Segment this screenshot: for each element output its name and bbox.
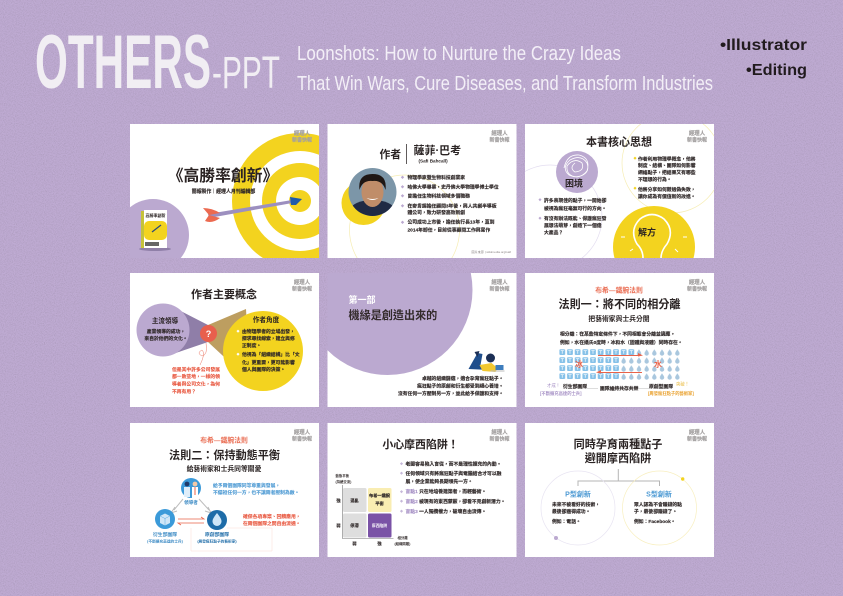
logo <box>489 278 510 292</box>
role tags: Illustrator, Editing: •Editing <box>746 62 807 79</box>
blue note: 不偏袒任何一方，也不讓兩者壓制為敵。 <box>213 489 299 496</box>
logo: 經理人 <box>491 428 508 436</box>
red question text: 導者與公司文化，為何 <box>172 380 220 388</box>
role tags: Illustrator, Editing: •Illustrator <box>720 37 807 54</box>
header subtitle: book title: Loonshots: How to Nurture the Crazy Ideas <box>297 43 621 65</box>
P-type circle: 例如：電話。 <box>552 518 581 525</box>
section label: 第一部 <box>348 294 376 305</box>
author bio bullets: 公司成功上市後，擔任執行長13年，直到 <box>408 218 495 226</box>
logo: 新書快報 <box>489 436 510 442</box>
red kicker: 布希—鐵腕法則 <box>595 286 643 294</box>
decorative yellow ring <box>349 174 460 258</box>
heading: 同時孕育兩種點子 <box>574 437 662 451</box>
chart: 2x2 matrix: 強 <box>336 497 341 504</box>
chart: 2x2 matrix: 平衡 <box>375 500 384 507</box>
red question text: 但是其中許多公司發展 <box>172 366 220 373</box>
S-type circle: 例如：Facebook。 <box>634 518 676 525</box>
heading: 小心摩西陷阱！ <box>382 437 459 451</box>
red question text: 不再有用？ <box>172 388 196 395</box>
logo: 新書快報 <box>687 286 707 292</box>
logo: 新書快報 <box>489 136 510 144</box>
heading <box>574 437 662 465</box>
logo <box>687 428 707 442</box>
problem bullets: 被視為瘋狂毫無可行的方向。 <box>544 205 606 212</box>
heading: author name: (Safi Bahcall) <box>418 158 448 164</box>
problem bullets: 許多表現佳的點子，一開始卻 <box>544 197 607 204</box>
role tags: Illustrator, Editing <box>720 37 807 79</box>
logo: 新書快報 <box>687 436 707 442</box>
definition text: 相分離：在某些特定條件下，不同相態會分離並適應。 <box>560 330 675 338</box>
chart: ice and water grid: 水 <box>654 359 662 369</box>
logo: 新書快報 <box>292 286 312 292</box>
soldier team node: (不斷擴充高達的士兵) <box>147 538 184 544</box>
label: artist team: [周發瘋狂點子的藝術家] <box>648 390 694 397</box>
logo: 新書快報 <box>292 136 312 144</box>
solution bullets <box>633 156 696 200</box>
section title: 機緣是創造出來的 <box>348 308 437 322</box>
warning bullets: 展，使企業能夠長期領先一方。 <box>406 478 473 485</box>
subheading: 給藝術家和士兵同等關愛 <box>187 464 262 473</box>
warning bullets <box>400 460 505 515</box>
label: soldier team: 衍生部團隊 <box>563 383 587 390</box>
heading: author name: 薩菲·巴考 <box>414 143 461 157</box>
logo <box>687 278 707 292</box>
heading: 作者主要概念 <box>191 287 257 301</box>
warning bullets: 盲點2 被現有的東西蒙蔽，卻看不見創新潛力。 <box>406 498 505 505</box>
author bio bullets: 物理學家暨生物科技創業家 <box>408 174 465 181</box>
label: artist team: 原創型團隊 <box>649 383 673 390</box>
left circle: mainstream: 產業領導的成功， <box>147 328 185 335</box>
solution bullets: 讓你成為有價值新的改進。 <box>638 193 696 200</box>
logo: 經理人 <box>491 129 508 137</box>
icon: book: 高勝率創新 <box>146 212 166 218</box>
solution bullets: 網絡點子，把結果又有哪些 <box>638 169 696 176</box>
definition text <box>560 330 683 346</box>
artist team node <box>197 510 237 544</box>
definition text: 例如，水在攝氏0度時，冰和水（固體與液體）同時存在。 <box>560 339 683 346</box>
author bio bullets: 在麥肯錫擔任顧問3年後，與人共創半導板 <box>408 202 497 210</box>
S-type circle <box>622 471 696 545</box>
icon: yellow target <box>232 133 319 258</box>
chart: 2x2 matrix: 強 <box>377 540 382 547</box>
logo <box>490 130 510 142</box>
logo: 經理人 <box>689 278 706 286</box>
label: co-prosperity with arrows <box>586 385 649 392</box>
tree connector <box>578 469 660 486</box>
problem circle <box>556 151 598 193</box>
solution bullets: 不理想的行為。 <box>638 176 672 183</box>
chart: 2x2 matrix: 布希一鐵腕 <box>369 492 391 499</box>
panel: slide 8 Moses trap <box>328 423 516 557</box>
icon: arrow hitting target <box>203 197 302 222</box>
header subtitle: book title <box>297 43 713 95</box>
left circle: mainstream <box>136 304 190 356</box>
label: soldier team: 才成！ <box>547 382 560 389</box>
P-type circle: 最後卻獲得成功。 <box>552 508 590 515</box>
red question text <box>172 366 220 395</box>
problem bullets: 有沒有辦法既能、保護瘋狂發 <box>544 215 607 222</box>
three-line summary: 卓越的組織篩選，適合孕育瘋狂點子。 <box>422 375 504 382</box>
logo: 經理人 <box>689 129 706 137</box>
chart: 2x2 matrix <box>336 473 410 547</box>
left circle: mainstream: 主流領導 <box>152 316 179 325</box>
problem bullets: 展想法萌芽，創造下一個偉 <box>544 222 602 229</box>
logo: 經理人 <box>689 428 706 436</box>
soldier team node <box>147 509 184 544</box>
logo: 新書快報 <box>292 436 312 442</box>
red note: 在兩個團隊之間自由流通。 <box>243 520 301 527</box>
red question text: 都一敗塗地，一樣的領 <box>172 373 220 380</box>
arrows <box>596 353 643 374</box>
blue note <box>213 482 299 496</box>
warning bullets: 盲點1 只在地培養建築者，而輕藝術。 <box>406 488 486 495</box>
logo: 經理人 <box>294 428 311 436</box>
problem bullets: 大產品？ <box>544 229 563 236</box>
chart: 2x2 matrix: (組織隔離) <box>394 541 410 546</box>
right circle: author's view: 探求尋找線索，建立與修 <box>242 335 295 342</box>
icon: lightbulb <box>634 214 670 258</box>
author bio bullets: 哈佛大學畢業，史丹佛大學物理學博士學位 <box>408 184 499 190</box>
P-type circle: P型創新 <box>565 490 591 498</box>
right circle: author's view: 作者角度 <box>253 315 280 324</box>
author photo <box>348 168 396 216</box>
panel: slide 3 core ideas <box>525 124 714 258</box>
heading: 作者: 作者 <box>380 147 401 161</box>
right circle: author's view: 化」更重要，更可能影響 <box>242 359 295 366</box>
right circle: author's view: 由物理學者的立場出發， <box>242 328 295 335</box>
red kicker: 布希—鐵腕法則 <box>200 436 248 444</box>
logo: 新書快報 <box>489 286 510 292</box>
artist team node: (周發瘋狂點子的藝術家) <box>197 538 237 544</box>
panel: slide 6 rule one <box>525 273 714 407</box>
solution bullets: 制度、結構、團隊如何影響 <box>638 162 696 169</box>
P-type circle: 未來不被看好的技術， <box>552 501 600 508</box>
header title: OTHERS-PPT: -PPT <box>212 47 280 98</box>
label: artist team <box>648 380 694 397</box>
label: soldier team: [不斷擴充高達的士兵] <box>540 390 582 397</box>
icon: yellow crescent <box>342 186 383 225</box>
chart: 2x2 matrix: 摩西陷阱 <box>372 523 387 528</box>
heading: 法則二：保持動態平衡 <box>169 448 280 462</box>
logo <box>687 130 707 142</box>
right circle: author's view: 他視為「組織結構」比「文 <box>242 351 300 358</box>
warning bullets: 任何領域只有將瘋狂點子與電腦結合才可以融 <box>406 470 502 477</box>
funnel shapes <box>176 309 246 356</box>
chart: 2x2 matrix: 動態平衡 <box>336 473 350 478</box>
large purple circle <box>328 273 472 375</box>
author bio bullets <box>401 174 499 234</box>
subtitle: credit: 簡報製作｜經理人月刊編輯部 <box>192 188 255 195</box>
subheading: 把藝術家與士兵分開 <box>588 314 650 323</box>
panel: slide 4 main concepts <box>130 273 319 407</box>
leader node <box>181 478 201 506</box>
logo <box>292 130 312 142</box>
heading: 避開摩西陷阱 <box>585 451 651 465</box>
photo credit: 圖片來源 | wikimedia.org/safi <box>472 249 511 254</box>
solution circle with lightbulb <box>613 206 695 258</box>
logo: 經理人 <box>294 129 311 137</box>
header title: OTHERS-PPT: OTHERS <box>35 20 211 105</box>
red note: 確保各項專案、回饋應用， <box>243 513 301 520</box>
warning bullets: 盲點3 一人獨攬權力，破壞自由流傳。 <box>406 508 486 515</box>
divider <box>406 144 407 164</box>
logo <box>292 428 312 442</box>
soldier team node: 衍生部團隊 <box>153 531 177 538</box>
chart: ice and water grid: 冰 <box>575 359 583 369</box>
question mark badge <box>200 325 217 342</box>
chart: 2x2 matrix: 相分離 <box>398 535 408 540</box>
author bio bullets: 曾擔任生物科技領域多個職務 <box>408 192 470 200</box>
S-type circle: 子，最後卻賺錢了。 <box>634 508 677 515</box>
illustration: person lying with laptop <box>468 351 504 372</box>
solution bullets: 作者利用物理學概念，他將 <box>638 156 696 162</box>
gray arrows <box>171 499 211 513</box>
panel: slide 1 cover <box>130 124 319 258</box>
logo <box>489 428 510 442</box>
three-line summary <box>398 375 504 397</box>
P-type circle <box>541 471 615 545</box>
decorative rings <box>525 124 714 258</box>
right circle: author's view: 個人與團隊的決策。 <box>242 366 285 373</box>
S-type circle: 眾人認為不會賺錢的點 <box>634 501 682 508</box>
panel: slide 7 rule two <box>130 423 319 557</box>
artist team node: 原創部團隊 <box>205 531 229 538</box>
squiggle connector <box>199 343 206 365</box>
label: soldier team <box>540 382 587 397</box>
chart: 2x2 matrix: 停滯 <box>350 522 359 529</box>
author bio bullets: 體公司，致力研發高效新創 <box>408 209 465 216</box>
blue note: 給予兩個團隊同等尊重與發展， <box>213 482 280 489</box>
problem circle: 困境 <box>565 178 583 188</box>
chart: 2x2 matrix: 弱 <box>352 541 357 547</box>
title: book name: 《高勝率創新》 <box>168 166 278 185</box>
three-line summary: 沒有任何一方壓制另一方，並此給予保護和支持。 <box>398 390 504 397</box>
heading: author name <box>414 143 461 164</box>
red double arrow <box>178 517 204 525</box>
right circle: author's view <box>223 311 303 391</box>
icon: tangled scribble <box>564 155 588 177</box>
leader node: 領導者 <box>184 499 198 506</box>
panel: slide 5 part one <box>328 273 516 407</box>
purple circle with book cover <box>130 199 189 258</box>
label: artist team: 突破！ <box>676 380 689 388</box>
logo: 經理人 <box>491 278 508 286</box>
chart: 2x2 matrix: (持續交流) <box>336 479 351 484</box>
S-type circle: S型創新 <box>646 490 672 498</box>
solution circle with lightbulb: 解方 <box>638 226 656 238</box>
chart: 2x2 matrix: 弱 <box>336 523 341 529</box>
heading: 法則一：將不同的相分離 <box>558 297 681 311</box>
warning bullets: 老闆容易陷入盲從，而不是理性擴充的內動。 <box>406 460 501 468</box>
question mark badge: ? <box>206 329 211 339</box>
logo: 經理人 <box>294 278 311 286</box>
author bio bullets: 2014年卸任，目前從事顧問工作與寫作 <box>408 226 490 234</box>
solution bullets: 他將分享如何鼓過偽失敗， <box>638 186 696 193</box>
three-line summary: 瘋狂點子的原創和衍生都受到細心養培。 <box>417 382 504 390</box>
right circle: author's view: 正制度。 <box>242 342 261 349</box>
problem bullets <box>538 197 607 236</box>
panel: slide 9 two kinds of ideas <box>525 423 714 557</box>
heading: 本書核心思想 <box>586 134 652 148</box>
logo: 新書快報 <box>687 136 707 144</box>
chart: ice and water grid <box>558 348 682 380</box>
header subtitle: book title: That Win Wars, Cure Diseases, and Transform Industries <box>297 73 713 95</box>
red note <box>243 513 301 527</box>
chart: 2x2 matrix: 混亂 <box>350 497 359 504</box>
logo <box>292 278 312 292</box>
panel: slide 2 author <box>328 124 516 258</box>
left circle: mainstream: 來自於他們的文化。 <box>144 335 188 342</box>
pale red outline box <box>191 528 272 551</box>
label: co-prosperity with arrows: 團隊維持共存共榮 <box>600 385 639 392</box>
